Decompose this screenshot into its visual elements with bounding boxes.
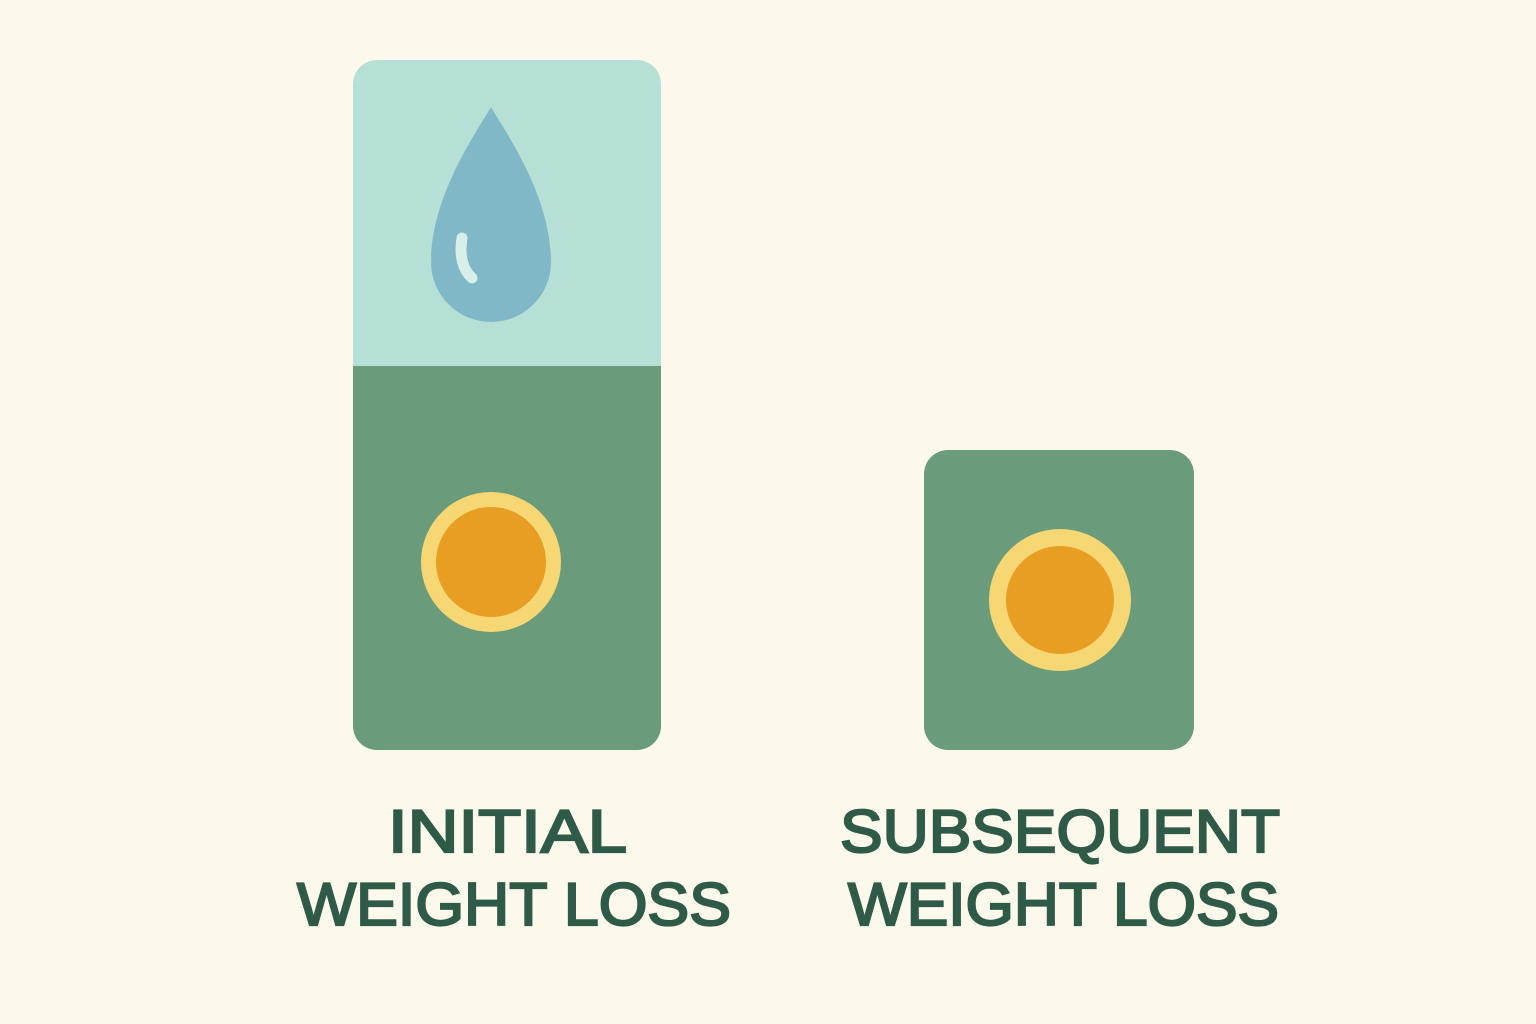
label: initial weight loss (297, 798, 731, 938)
label: subsequent weight loss: SUBSEQUENT (840, 798, 1280, 865)
panel: subsequent weight loss block (924, 450, 1194, 750)
label: subsequent weight loss: WEIGHT LOSS (848, 871, 1279, 938)
label: initial weight loss: WEIGHT LOSS (297, 871, 731, 938)
icon: water drop (431, 107, 551, 322)
label: initial weight loss: INITIAL (388, 798, 627, 865)
icon: fat circle (421, 492, 561, 632)
label: subsequent weight loss (840, 798, 1280, 938)
icon: fat circle small (989, 529, 1131, 671)
panel: initial weight loss bar (353, 60, 661, 750)
